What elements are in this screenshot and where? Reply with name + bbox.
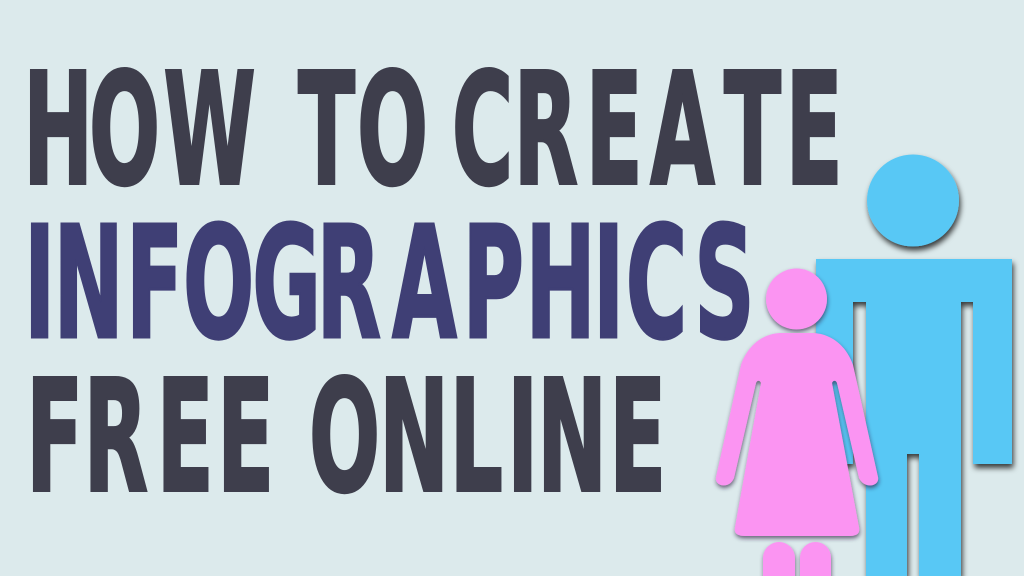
icon: woman figure [716,268,878,576]
heading line: infographics: INFOGRAPHICS [24,194,755,374]
title [23,40,843,528]
icon: man figure [816,154,1012,576]
heading line: free online: FREE ONLINE [26,347,666,528]
heading line: how to create: HOW TO CREATE [23,40,843,221]
